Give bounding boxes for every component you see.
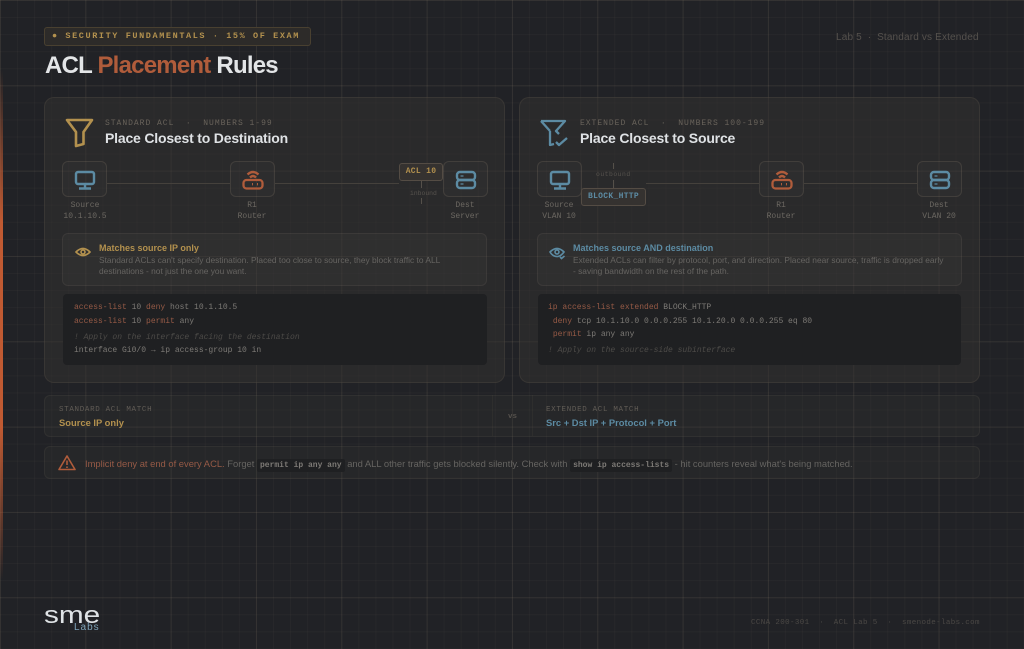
- node: destination server: [443, 161, 488, 197]
- code lines: standard: interface Gi0/0 → ip access-group 10 in: [74, 346, 261, 355]
- diagram link: source to router: [107, 183, 230, 184]
- comparison divider: vs: [492, 395, 533, 436]
- info heading: extended: Matches source AND destination: [573, 243, 713, 253]
- node: destination VLAN 20: [917, 161, 962, 197]
- node label: router: Router: [767, 212, 795, 220]
- code lines: extended: [548, 303, 812, 355]
- node label: source: [63, 201, 107, 220]
- info text: standard: Standard ACLs can't specify destination. Placed too close to source, they block traffic to ALL destinations - not just the one you want.: [99, 255, 440, 276]
- node label: router: Router: [238, 212, 266, 220]
- accent bar: left edge: [0, 70, 3, 580]
- heading: standard ACL: Place Closest to Destination: [105, 130, 288, 146]
- code block: extended: [538, 294, 961, 365]
- node label: source: 10.1.10.5: [63, 212, 107, 220]
- node label: source: Source: [71, 201, 99, 210]
- label: outbound: outbound: [596, 171, 631, 178]
- node label: router: R1: [776, 201, 786, 210]
- node: source: [62, 161, 107, 197]
- code lines: extended: permit ip any any: [553, 330, 634, 339]
- logo: sme labs: sme: [44, 602, 100, 629]
- diagram link: router to ACL: [275, 183, 399, 184]
- node label: destination: Dest: [455, 201, 475, 210]
- icon: funnel: [66, 118, 94, 148]
- info text: extended: Extended ACLs can filter by protocol, port, and direction. Placed near source, traffic is dropped early - saving bandwidth on the rest of the path.: [573, 255, 943, 276]
- code lines: standard: access-list 10 deny host 10.1.10.5: [74, 303, 237, 312]
- code lines: extended: ! Apply on the source-side subinterface: [548, 346, 735, 355]
- warning text: permit ip any any: [260, 461, 342, 470]
- eyebrow: extended ACL: EXTENDED ACL · NUMBERS 100-199: [580, 119, 765, 128]
- comparison label: standard: STANDARD ACL MATCH: [59, 406, 152, 414]
- footer text: CCNA 200-301 · ACL Lab 5 · smenode-labs.com: [751, 619, 980, 627]
- diagram link: tag to router: [646, 183, 759, 184]
- icon: warning triangle: [58, 455, 76, 470]
- warning bar: [44, 446, 980, 479]
- title: ACL Placement Rules: [45, 52, 278, 79]
- badge: section tag: [44, 27, 311, 46]
- comparison value: extended: Src + Dst IP + Protocol + Port: [546, 417, 676, 428]
- node label: destination VLAN 20: [922, 201, 956, 220]
- tag: ACL 10: ACL 10: [406, 167, 436, 176]
- panel: standard ACL: [44, 97, 505, 383]
- logo: sme labs: Labs: [74, 622, 100, 633]
- tag: BLOCK_HTTP: [581, 188, 646, 206]
- code lines: standard: [74, 303, 300, 355]
- node: router: [759, 161, 804, 197]
- tag: BLOCK_HTTP: BLOCK_HTTP: [588, 192, 639, 201]
- code lines: extended: ip access-list extended BLOCK_HTTP: [548, 303, 711, 312]
- comparison divider: vs: vs: [508, 413, 517, 421]
- node label: router: R1: [247, 201, 257, 210]
- node: router: [230, 161, 275, 197]
- badge: section tag: ● SECURITY FUNDAMENTALS · 15% OF EXAM: [52, 31, 300, 41]
- panel: extended ACL: [519, 97, 980, 383]
- icon: eye with check: [549, 248, 565, 260]
- lab label: top right: Lab 5 · Standard vs Extended: [836, 32, 979, 43]
- warning text: show ip access-lists: [573, 461, 669, 470]
- direction marker: inbound: [421, 181, 422, 188]
- node: source VLAN 10: [537, 161, 582, 197]
- code lines: standard: access-list 10 permit any: [74, 317, 194, 326]
- comparison label: extended: EXTENDED ACL MATCH: [546, 406, 639, 414]
- warning text: Implicit deny at end of every ACL. Forget and ALL other traffic gets blocked silently. Check with - hit counters reveal what's being matched.: [85, 458, 853, 469]
- node label: destination: Server: [451, 212, 479, 220]
- node label: source VLAN 10: VLAN 10: [542, 212, 576, 220]
- heading: extended ACL: Place Closest to Source: [580, 130, 735, 146]
- info heading: standard: Matches source IP only: [99, 243, 199, 253]
- comparison bar: [44, 395, 980, 437]
- node label: destination VLAN 20: VLAN 20: [922, 212, 956, 220]
- info box: extended: [537, 233, 962, 286]
- eyebrow: standard ACL: STANDARD ACL · NUMBERS 1-99: [105, 119, 273, 128]
- node label: router: [767, 201, 795, 220]
- code lines: standard: ! Apply on the interface facing the destination: [74, 333, 300, 342]
- code lines: extended: deny tcp 10.1.10.0 0.0.0.255 10.1.20.0 0.0.0.255 eq 80: [553, 317, 812, 326]
- info box: standard: [62, 233, 487, 286]
- tag: ACL 10: [399, 163, 443, 181]
- direction marker: outbound upper: [613, 163, 614, 169]
- code block: standard: [63, 294, 487, 365]
- direction marker: inbound lower: [421, 198, 422, 204]
- node label: source VLAN 10: Source: [545, 201, 573, 210]
- node label: source VLAN 10: [542, 201, 576, 220]
- diagram link: router to destination: [804, 183, 917, 184]
- label: inbound: inbound: [410, 190, 437, 197]
- node label: destination VLAN 20: Dest: [929, 201, 949, 210]
- icon: funnel with check: [540, 120, 568, 146]
- direction marker: outbound lower: [613, 180, 614, 188]
- icon: eye: [75, 248, 91, 256]
- node label: router: [238, 201, 266, 220]
- comparison value: standard: Source IP only: [59, 417, 124, 428]
- node label: destination: [451, 201, 479, 220]
